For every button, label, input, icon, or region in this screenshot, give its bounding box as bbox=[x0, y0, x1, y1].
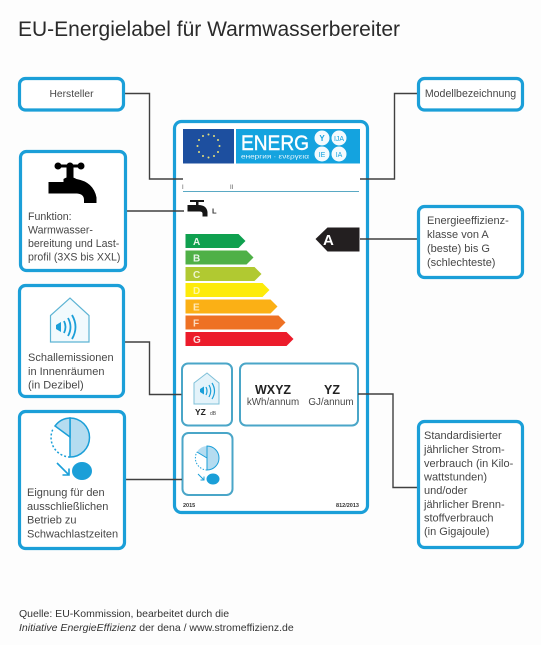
model row: II bbox=[230, 185, 234, 191]
consumption panel: kWh/annum bbox=[247, 397, 299, 408]
efficiency scale bars: A bbox=[193, 237, 200, 248]
box: Energieeffizienzklasse: (schlechteste) bbox=[427, 257, 495, 269]
efficiency scale bars: E bbox=[193, 302, 200, 314]
box: Energieeffizienzklasse bbox=[418, 206, 522, 278]
consumption panel: GJ/annum bbox=[308, 397, 354, 408]
box: Modellbezeichnung: Modellbezeichnung bbox=[425, 88, 516, 100]
source note: Quelle: EU-Kommission, bearbeitet durch die bbox=[19, 608, 229, 620]
energy label bbox=[174, 122, 368, 512]
connector: Energieeffizienz bbox=[360, 238, 418, 240]
consumption panel bbox=[240, 364, 358, 426]
box: Funktion bbox=[20, 152, 126, 270]
icon: small tap with load profile: L bbox=[212, 206, 217, 216]
icon: house with sound bbox=[194, 373, 219, 404]
box: Standardisierter Verbrauch: wattstunden) bbox=[423, 472, 487, 484]
model row bbox=[182, 185, 359, 192]
box: Energieeffizienzklasse: Energieeffizienz- bbox=[427, 215, 509, 227]
connector: Funktion bbox=[126, 210, 184, 212]
noise panel: YZ bbox=[195, 407, 206, 417]
icon: water tap bbox=[48, 162, 96, 203]
icon: clock and water bbox=[51, 418, 92, 480]
box: Standardisierter Verbrauch: (in Gigajoule) bbox=[424, 526, 489, 538]
box: Eignung: Eignung für den bbox=[27, 487, 105, 499]
ENERG banner bbox=[236, 129, 360, 164]
ENERG banner: ENERG bbox=[241, 132, 309, 155]
box: Energieeffizienzklasse: klasse von A bbox=[427, 229, 489, 241]
box: Funktion: Warmwasser- bbox=[28, 224, 93, 236]
box: Schallemissionen: in Innenräumen bbox=[28, 366, 104, 378]
efficiency scale bars bbox=[186, 234, 294, 346]
model row: I bbox=[182, 185, 184, 191]
box: Energieeffizienzklasse: (beste) bis G bbox=[427, 243, 490, 255]
box: Standardisierter Verbrauch: stoffverbrauch bbox=[424, 512, 494, 524]
ENERG banner: Y bbox=[319, 134, 325, 143]
box: Standardisierter Verbrauch: und/oder bbox=[424, 485, 468, 497]
box: Standardisierter Verbrauch: jährlicher Strom- bbox=[423, 444, 505, 456]
icon: small tap with load profile bbox=[188, 200, 217, 216]
box: Schallemissionen bbox=[20, 286, 124, 396]
icon: house with sound waves bbox=[50, 298, 89, 342]
EU flag bbox=[183, 129, 234, 164]
class arrow bbox=[316, 228, 360, 252]
ENERG banner: IE bbox=[319, 152, 326, 159]
connector: Standard bbox=[358, 394, 418, 488]
consumption panel: YZ bbox=[324, 383, 340, 397]
source note: Initiative EnergieEffizienz der dena / www.stromeffizienz.de bbox=[19, 622, 294, 634]
regulation number: 812/2013 bbox=[336, 503, 359, 509]
box: Eignung: Schwachlastzeiten bbox=[27, 528, 118, 540]
box: Hersteller bbox=[20, 78, 124, 110]
efficiency scale bars: G bbox=[193, 335, 201, 346]
efficiency scale bars: D bbox=[193, 286, 200, 297]
ENERG banner: енергия · ενεργεια bbox=[241, 154, 310, 160]
connector: Modell bbox=[360, 94, 418, 179]
ENERG banner: IA bbox=[336, 152, 343, 159]
off-peak panel bbox=[182, 433, 232, 495]
efficiency scale bars: C bbox=[193, 270, 200, 281]
connector: Hersteller bbox=[124, 94, 183, 179]
box: Hersteller: Hersteller bbox=[49, 89, 94, 100]
noise panel: dB bbox=[210, 411, 217, 417]
noise panel bbox=[182, 364, 232, 426]
source note bbox=[19, 608, 294, 634]
box: Standardisierter Verbrauch: jährlicher Brenn- bbox=[423, 499, 505, 511]
box: Standardisierter Verbrauch bbox=[418, 422, 522, 548]
title: EU-Energielabel für Warmwasserbereiter bbox=[18, 18, 400, 41]
box: Funktion: bereitung und Last- bbox=[28, 238, 120, 250]
box: Modellbezeichnung bbox=[418, 78, 522, 110]
consumption panel: WXYZ bbox=[255, 383, 291, 397]
box: Standardisierter Verbrauch: Standardisierter bbox=[424, 430, 502, 442]
box: Funktion: Funktion: bbox=[28, 211, 72, 223]
box: Eignung: Betrieb zu bbox=[27, 514, 77, 526]
efficiency scale bars: B bbox=[193, 254, 200, 264]
box: Eignung: ausschließlichen bbox=[27, 501, 108, 513]
box: Schallemissionen: (in Dezibel) bbox=[28, 380, 84, 392]
icon: clock and water bbox=[195, 446, 220, 484]
connector: Eignung bbox=[125, 478, 182, 480]
box: Funktion: profil (3XS bis XXL) bbox=[28, 252, 120, 264]
box: Schallemissionen: Schallemissionen bbox=[28, 352, 114, 364]
connector: Schall bbox=[124, 342, 182, 394]
class arrow: A bbox=[323, 232, 334, 249]
ENERG banner: IJA bbox=[334, 136, 344, 143]
year: 2015 bbox=[183, 503, 195, 509]
efficiency scale bars: F bbox=[193, 318, 199, 330]
box: Standardisierter Verbrauch: verbrauch (in Kilo- bbox=[424, 458, 514, 470]
box: Eignung bbox=[20, 412, 124, 548]
